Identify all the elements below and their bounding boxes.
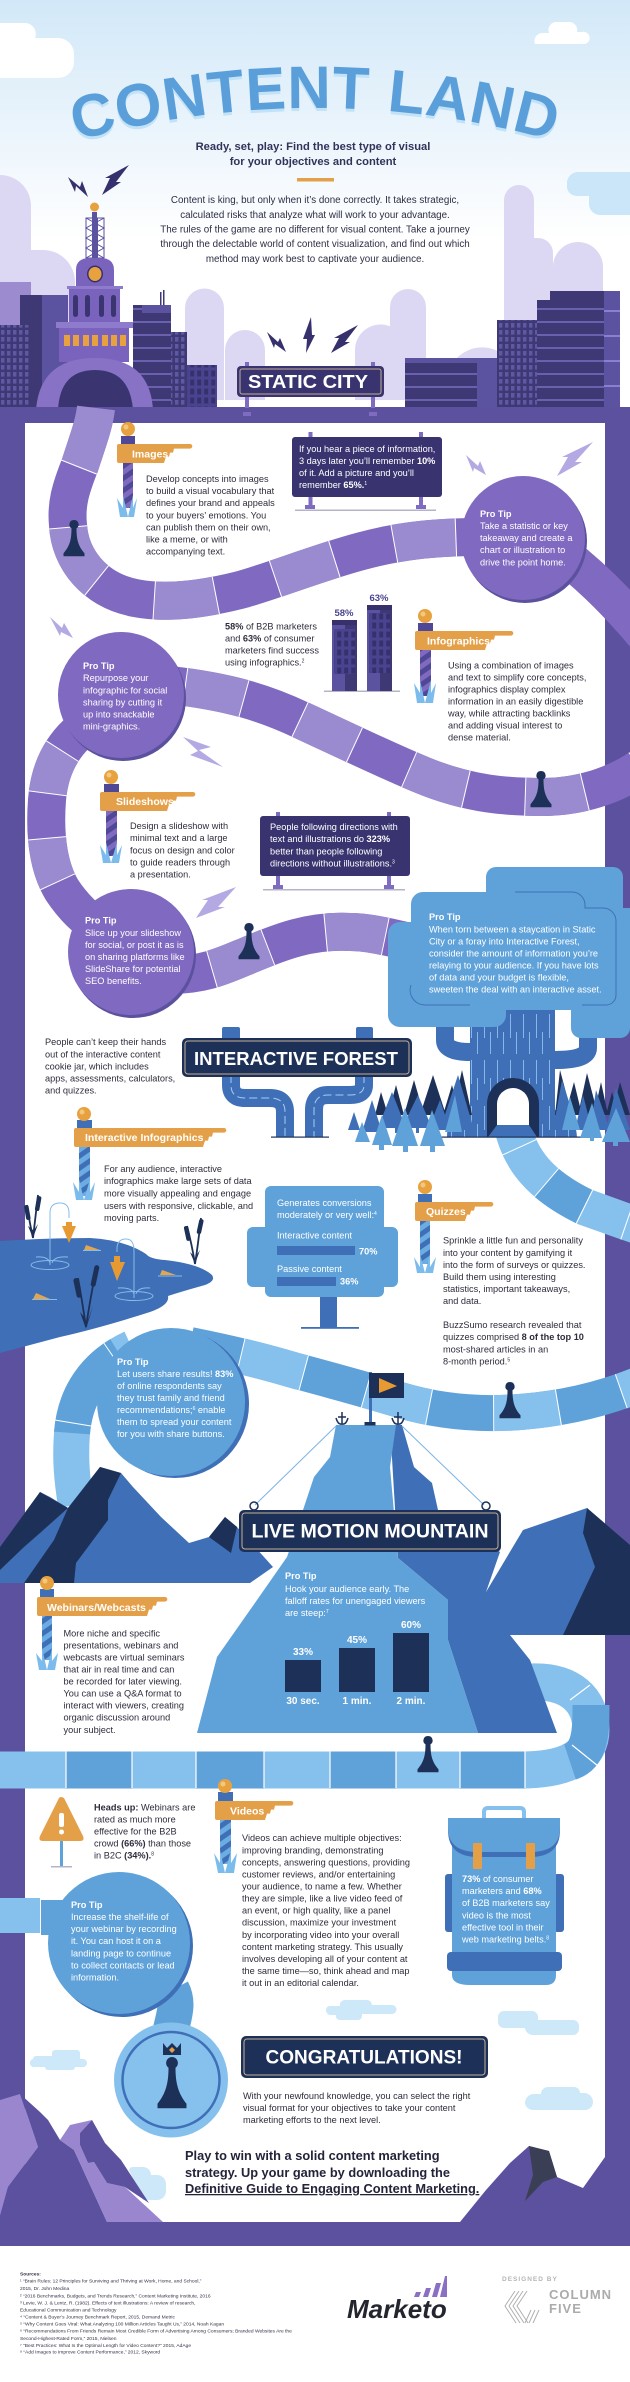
tree trunk [438, 1005, 588, 1138]
track: to pro tip stub [0, 1898, 71, 1935]
signpost: interactive infographics: Interactive Infographics [85, 1132, 204, 1144]
text: quizzes: and data. [443, 1296, 481, 1306]
track: to medallion [170, 1990, 175, 2035]
pro tip circle 1: drive the point home. [480, 557, 566, 567]
text: images: Develop concepts into images [146, 474, 269, 484]
pro tip circle 5: it. You can host it on a [71, 1936, 162, 1946]
cloud: right blue [567, 172, 630, 215]
signpost: slideshows [100, 770, 195, 863]
game track: purple 1 [68, 408, 480, 601]
text: infographics: and text to simplify core concepts, [448, 672, 586, 682]
tree canopy with pro tip: relaying to your audience. If you have lots [429, 960, 599, 970]
text: videos: it out in an editorial calendar. [242, 1978, 359, 1988]
pro tip circle 4: of online respondents say [117, 1381, 222, 1391]
callout sign: directions stat: directions without illustrations. [270, 858, 392, 868]
clouds: bottom [30, 2000, 593, 2200]
track: blue wave [190, 1345, 630, 1413]
crown [163, 2043, 181, 2055]
callout sign: memory stat: 65%. [343, 480, 364, 490]
bar chart: falloff: 45% [347, 1635, 367, 1646]
pro tip circle 3: SEO benefits. [85, 976, 142, 986]
text: heads up: Heads up: [94, 1803, 138, 1813]
pro tip circle 5: Increase the shelf-life of [71, 1912, 169, 1922]
pro tip: falloff text: 7 [326, 1609, 329, 1615]
intro text: Content is king, but only when it’s done correctly. It takes strategic, [171, 195, 459, 206]
stat board: conversions: Interactive content [277, 1230, 353, 1240]
text: videos: concepts, answering questions, providing [242, 1857, 410, 1867]
lightning: tower [68, 165, 129, 197]
backpack: 73% [462, 1874, 480, 1884]
sign: static city [237, 362, 384, 416]
text: videos: Videos can achieve multiple objectives: [242, 1833, 402, 1843]
chart: infographics buildings [324, 593, 400, 692]
text: webinars: webcasts are virtual seminars [62, 1652, 185, 1662]
text: interactive infographics: users with responsive, clickable, and [104, 1201, 253, 1211]
text: webinars: You can use a Q&A format to [64, 1689, 182, 1699]
text: call to action: strategy. Up your game by downloading the [185, 2165, 450, 2180]
track: blue left curve [71, 1348, 132, 1505]
tree canopy with pro tip: of data and your budget is flexible, [429, 972, 569, 982]
backpack: 8 [546, 1935, 549, 1941]
white sign backdrop [265, 395, 355, 409]
text: slideshows: focus on design and color [130, 845, 235, 855]
fish fins [33, 1245, 176, 1299]
city left buildings [0, 282, 217, 412]
footer: sources: ⁵ “Why Content Goes Viral: What Analyzing 100 Million Articles Taught Us,” 2014, Noah Kagan [20, 2322, 224, 2328]
bar chart: falloff: 60% [401, 1620, 421, 1631]
text: heads up: (34%). [124, 1851, 151, 1861]
pro tip circle 4: 6 [193, 1406, 196, 1412]
white panel [25, 423, 605, 2222]
pro tip circle 3: SlideShare for potential [85, 964, 181, 974]
text: interactive intro: apps, assessments, calculators, [45, 1074, 175, 1084]
lightning: decorations [50, 442, 593, 918]
text: webinars: presentations, webinars and [64, 1640, 178, 1650]
pro tip circle 1 [461, 476, 587, 603]
footer: sources: ⁶ “Recommendations From Friends Remain Most Credible Form of Advertising Among Consumers; Branded Websites Are the [20, 2329, 292, 2335]
footer: sources: ⁴ “Content & Buyer’s Journey Benchmark Report, 2015, Demand Metric [20, 2315, 176, 2321]
tree canopy with pro tip: City or a foray into Interactive Forest, [429, 936, 580, 946]
text: interactive intro: out of the interactive content [45, 1049, 161, 1059]
fountain arcs [31, 1203, 153, 1300]
reeds [27, 1195, 201, 1327]
text: quizzes: 8 of the top 10 [522, 1332, 584, 1342]
callout sign: memory stat: 3 days later you’ll remember [299, 456, 417, 466]
cloud: top left [0, 23, 74, 78]
signpost: videos [214, 1779, 293, 1873]
king pawn [158, 2057, 186, 2108]
text: videos: your audience, to name a few. Whether [242, 1882, 402, 1892]
callout sign: memory stat: 10% [417, 456, 435, 466]
intro text: through the delectable world of content visualization, and find out which [160, 239, 470, 250]
text: interactive infographics: For any audience, interactive [104, 1164, 222, 1174]
footer: sources: ⁷ “Best Practices: What Is the Optimal Length for Video Content?” 2015, AdAge [20, 2343, 191, 2349]
callout sign: directions stat: text and illustrations do [270, 834, 367, 844]
text: videos: discussion, maximize your investment [242, 1918, 397, 1928]
signpost: images [117, 422, 192, 517]
pawn 4 [500, 1382, 520, 1418]
stat board: conversions: 36% [340, 1276, 358, 1286]
bar chart: falloff: 30 sec. [286, 1696, 320, 1707]
title: CONTENT LAND [72, 70, 556, 140]
signpost: quizzes: Quizzes [426, 1206, 466, 1218]
text: quizzes: 5 [507, 1358, 510, 1364]
text: infographics: dense material. [448, 733, 511, 743]
pro tip circle 2: Pro Tip [83, 661, 115, 671]
pro tip circle 2: sharing by cutting it [83, 697, 163, 707]
text: infographic stat: and [225, 634, 243, 644]
pro tip circle 5 [48, 1872, 193, 2017]
logo: marketo [347, 2276, 447, 2324]
text: videos: improving branding, demonstrating [242, 1845, 383, 1855]
signpost: videos: Videos [230, 1806, 264, 1818]
right mountains [450, 1508, 630, 1635]
stat board: conversions [247, 1186, 398, 1329]
subtitle: Ready, set, play: Find the best type of visual [196, 141, 430, 153]
text: webinars: be recorded for later viewing. [64, 1677, 182, 1687]
callout sign: directions stat: People following directions with [270, 822, 398, 832]
bar chart: falloff: 2 min. [397, 1696, 426, 1707]
pro tip circle 3: Slice up your slideshow [85, 928, 181, 938]
sign: live motion mountain: LIVE MOTION MOUNTAIN [252, 1522, 488, 1542]
text: slideshows: to guide readers through [130, 857, 230, 867]
tree canopy with pro tip: When torn between a staycation in Static [429, 924, 596, 934]
callout sign: memory stat: remember [299, 480, 343, 490]
text: webinars: interact with viewers, creating [64, 1701, 184, 1711]
text: interactive intro: cookie jar, which includes [45, 1061, 149, 1071]
pro tip circle 1: Take a statistic or key [480, 521, 568, 531]
text: infographics: infographics display complex [448, 684, 566, 694]
bar chart: falloff [285, 1620, 429, 1707]
pro tip circle 3 [68, 889, 196, 1018]
pawn 3 [238, 923, 260, 959]
backpack: of B2B marketers say [462, 1898, 550, 1908]
callout sign: directions stat [260, 812, 410, 890]
text: heads up: Webinars are [138, 1803, 195, 1813]
text: interactive infographics: moving parts. [104, 1213, 159, 1223]
sign: interactive forest: INTERACTIVE FOREST [194, 1048, 399, 1069]
pro tip circle 4: recommendations; [117, 1405, 193, 1415]
signpost: infographics: Infographics [427, 636, 490, 648]
backpack: marketers and [462, 1886, 523, 1896]
footer: sources: ⁸ “Add Images to Improve Content Performance,” 2012, Skyword [20, 2350, 160, 2356]
text: webinars: More niche and specific [64, 1628, 160, 1638]
chart: infographics buildings: 58% [334, 608, 354, 619]
pro tip circle 2: infographic for social [83, 685, 167, 695]
city right buildings [405, 291, 620, 411]
ropes [255, 1426, 484, 1505]
text: infographic stat: marketers find success [225, 646, 319, 656]
logo: marketo: Marketo [347, 2294, 447, 2324]
text: infographics: information in an easily digestible [448, 696, 583, 706]
text: webinars: that air in real time and can [64, 1664, 174, 1674]
orange arrows [62, 1222, 76, 1243]
text: quizzes: into your content by gamifying it [443, 1248, 573, 1258]
callout sign: memory stat: of it. Add a picture and you’ll [299, 468, 414, 478]
signpost: images: Images [132, 448, 168, 460]
text: heads up: effective for the B2B [94, 1827, 177, 1837]
game track: purple 2 [170, 552, 630, 797]
text: quizzes: Sprinkle a little fun and personality [443, 1236, 583, 1246]
lightning: above sign [267, 317, 358, 353]
left mountains [0, 1467, 273, 1583]
text: videos: the same time—so, think ahead and map [242, 1966, 410, 1976]
pro tip circle 2 [58, 632, 186, 761]
pro tip circle 4: Let users share results! [117, 1369, 215, 1379]
footer: sources: Sources: [20, 2272, 41, 2278]
text: videos: an event, or high quality, like a panel [242, 1906, 390, 1916]
pro tip circle 4: they trust family and friend [117, 1393, 225, 1403]
pro tip circle 2: up into snackable [83, 709, 155, 719]
stat board: conversions: Generates conversions [277, 1198, 372, 1208]
text: infographic stat: 58% [225, 622, 243, 632]
stat board: conversions: 4 [374, 1211, 377, 1217]
text: heads up: in B2C [94, 1851, 124, 1861]
text: infographics: Using a combination of images [448, 660, 574, 670]
pro tip circle 4: Pro Tip [117, 1357, 149, 1367]
text: quizzes: quizzes comprised [443, 1332, 522, 1342]
intro text: The rules of the game are no different for visual content. Take a journey [160, 224, 470, 236]
text: quizzes: 8-month period. [443, 1357, 507, 1367]
purple frame [0, 407, 630, 2246]
clock tower [36, 202, 153, 410]
text: heads up: rated as much more [94, 1815, 176, 1825]
text: infographic stat: 63% of consumer [243, 634, 314, 644]
pro tip circle 5: your webinar by recording [71, 1924, 177, 1934]
warning sign [39, 1797, 84, 1868]
pro tip circle 3: for social, or post it as is [85, 940, 184, 950]
text: interactive intro: and quizzes. [45, 1086, 97, 1096]
stat board: conversions: Passive content [277, 1264, 342, 1274]
subtitle: for your objectives and content [230, 156, 397, 168]
footer: sources: Educational Communication and Technology [20, 2308, 117, 2314]
pond [0, 1195, 213, 1353]
pro tip circle 5: Pro Tip [71, 1900, 103, 1910]
text: congratulations: With your newfound knowledge, you can select the right [243, 2091, 471, 2101]
pro tip: falloff text: Pro Tip [285, 1571, 317, 1581]
tree canopy with pro tip: Pro Tip [429, 912, 461, 922]
text: slideshows: minimal text and a large [130, 833, 228, 843]
orange divider [297, 178, 334, 182]
pro tip circle 2: Repurpose your [83, 673, 148, 683]
pawn 5 [418, 1736, 438, 1772]
tree canopy with pro tip: sweeten the deal with an interactive asset. [429, 984, 602, 994]
signpost: quizzes [414, 1180, 493, 1273]
signpost: infographics [414, 609, 513, 703]
text: congratulations: marketing efforts to the next level. [243, 2115, 381, 2125]
purple mountains right [460, 2146, 605, 2222]
text: heads up: (66%) than those [121, 1839, 191, 1849]
backpack: web marketing belts. [461, 1934, 546, 1944]
signpost: webinars [36, 1576, 167, 1670]
central mountain [197, 1425, 557, 1733]
pawn 2 [530, 771, 552, 807]
text: heads up: crowd [94, 1839, 121, 1849]
text: quizzes: most-shared articles in an [443, 1345, 548, 1355]
text: infographics: and adding visual interest to [448, 721, 562, 731]
pro tip: falloff text: are steep: [285, 1608, 326, 1618]
text: infographic stat: 2 [302, 659, 305, 665]
anchors [336, 1412, 404, 1424]
sign: live motion mountain [239, 1502, 501, 1552]
sign: static city: STATIC CITY [248, 372, 368, 392]
text: videos: they are simple, like a live video feed of [242, 1894, 403, 1904]
sky background [0, 0, 630, 240]
logo: column five: COLUMN [549, 2287, 612, 2302]
pro tip circle 4: for you with share buttons. [117, 1429, 225, 1439]
skyline back clouds [0, 175, 603, 400]
callout sign: memory stat: If you hear a piece of information, [299, 444, 435, 454]
tree canopy with pro tip: consider the amount of information you’re [429, 948, 598, 958]
text: images: like a meme, or with [146, 534, 228, 544]
text: webinars: organic discussion around [64, 1713, 170, 1723]
backpack: of consumer [480, 1874, 534, 1884]
backpack: video is the most [462, 1910, 531, 1920]
pro tip circle 3: on sharing platforms like [85, 952, 185, 962]
text: heads up: 8 [151, 1852, 154, 1858]
pro tip circle 1: chart or illustration to [480, 545, 565, 555]
medallion [114, 2022, 228, 2138]
footer: sources: 2015, Dr. John Medina [20, 2286, 69, 2292]
chart: infographics buildings: 63% [369, 593, 389, 604]
trees right [553, 1070, 630, 1146]
text: infographics: way, while attracting backlinks [447, 709, 571, 719]
footer: sources: ³ Levie, W. J. & Lentz, R. (1982). Effects of text illustrations: A review of research, [20, 2300, 196, 2306]
text: videos: content marketing strategy. This usually [242, 1942, 403, 1952]
text: images: to your buyers’ emotions. You [146, 510, 266, 520]
text: quizzes: into the form of surveys or quizzes. [443, 1260, 585, 1270]
callout sign: directions stat: 3 [392, 859, 395, 865]
text: videos: involves developing all of your content at [242, 1954, 408, 1964]
text: interactive infographics: infographics make large sets of data [104, 1176, 252, 1186]
pro tip circle 5: information. [71, 1972, 119, 1982]
callout sign: directions stat: 323% [367, 834, 390, 844]
logo: column five: DESIGNED BY [502, 2276, 558, 2283]
text: images: to build a visual vocabulary that [146, 486, 275, 496]
text: images: defines your brand and appeals [146, 498, 275, 508]
flag [364, 1372, 404, 1426]
tree canopy with pro tip [388, 867, 630, 1038]
game track: purple 4 [170, 932, 410, 975]
text: infographic stat: of B2B marketers [243, 622, 317, 632]
title: CONTENT LAND [72, 66, 556, 136]
text: quizzes: BuzzSumo research revealed that [443, 1320, 582, 1330]
text: interactive infographics: more visually appealing and engage [104, 1189, 251, 1199]
pro tip: falloff text: Hook your audience early. The [285, 1584, 409, 1594]
callout sign: memory stat: 1 [364, 481, 367, 487]
callout sign: memory stat [292, 432, 442, 511]
text: quizzes: Build them using interesting [443, 1272, 556, 1282]
text: videos: customer reviews, and/or entertaining [242, 1869, 395, 1879]
game track: purple 3 [46, 720, 110, 935]
purple mountains left [0, 2094, 163, 2222]
sign: congratulations [241, 2036, 488, 2078]
text: slideshows: Design a slideshow with [130, 821, 228, 831]
sign: interactive forest [182, 1027, 412, 1138]
text: infographic stat: using infographics. [225, 658, 302, 668]
text: slideshows: a presentation. [130, 869, 191, 879]
pro tip circle 4: them to spread your content [117, 1417, 232, 1427]
intro text: calculated risks that analyze what will work to your advantage. [180, 210, 450, 221]
stat board: conversions: moderately or very well: [277, 1210, 374, 1220]
bar chart: falloff: 1 min. [343, 1696, 372, 1707]
pro tip: falloff text: falloff rates for unengaged viewers [285, 1596, 426, 1606]
sign: congratulations: CONGRATULATIONS! [266, 2048, 462, 2068]
text: webinars: your subject. [64, 1725, 116, 1735]
pro tip circle 4: enable [195, 1405, 226, 1415]
signpost: slideshows: Slideshows [116, 796, 174, 808]
pro tip circle 2: mini-graphics. [83, 721, 140, 731]
text: quizzes: statistics, important takeaways, [443, 1284, 570, 1294]
footer: sources: ² “2016 Benchmarks, Budgets, and Trends Research,” Content Marketing Institute, 2016 [20, 2294, 211, 2300]
pro tip circle 4 [97, 1328, 249, 1478]
logo: column five [502, 2276, 612, 2323]
logo: column five: FIVE [549, 2301, 582, 2316]
text: call to action: Definitive Guide to Engaging Content Marketing. [185, 2181, 479, 2196]
pro tip circle 5: to collect contacts or lead [71, 1960, 175, 1970]
pro tip circle 3: Pro Tip [85, 916, 117, 926]
track: blue from tree [512, 1125, 630, 1228]
bar chart: falloff: 33% [293, 1647, 313, 1658]
text: videos: by incorporating video into your overall [242, 1930, 399, 1940]
text: images: can publish them on their own, [146, 522, 271, 532]
callout sign: directions stat: better than people following [270, 846, 382, 856]
pro tip circle 4: 83% [215, 1369, 233, 1379]
track: blue U-turn [0, 1682, 598, 1788]
text: images: accompanying text. [146, 546, 225, 556]
intro text: method may work best to captivate your audience. [206, 254, 424, 265]
stat board: conversions: 70% [359, 1246, 377, 1256]
footer: sources: ¹ “Brain Rules: 12 Principles for Surviving and Thriving at Work, Home, and School,” [20, 2279, 202, 2285]
signpost: webinars: Webinars/Webcasts [47, 1602, 146, 1614]
pro tip circle 1: Pro Tip [480, 509, 512, 519]
text: congratulations: visual format for your objectives to take your content [243, 2103, 456, 2113]
footer: sources: Second-Highest-Rated Form,” 2015, Nielsen [20, 2336, 117, 2342]
signpost: interactive infographics [73, 1107, 226, 1200]
text: interactive intro: People can’t keep their hands [45, 1037, 166, 1047]
text: call to action: Play to win with a solid content marketing [185, 2148, 440, 2163]
backpack: 68% [523, 1886, 542, 1896]
backpack: effective tool in their [462, 1922, 544, 1932]
pro tip circle 1: takeaway and create a [480, 533, 573, 543]
trees left [348, 1070, 474, 1152]
backpack [445, 1808, 564, 1985]
pro tip circle 5: landing page to continue [71, 1948, 171, 1958]
pawn 1 [64, 520, 84, 556]
cloud: top right [534, 22, 590, 44]
